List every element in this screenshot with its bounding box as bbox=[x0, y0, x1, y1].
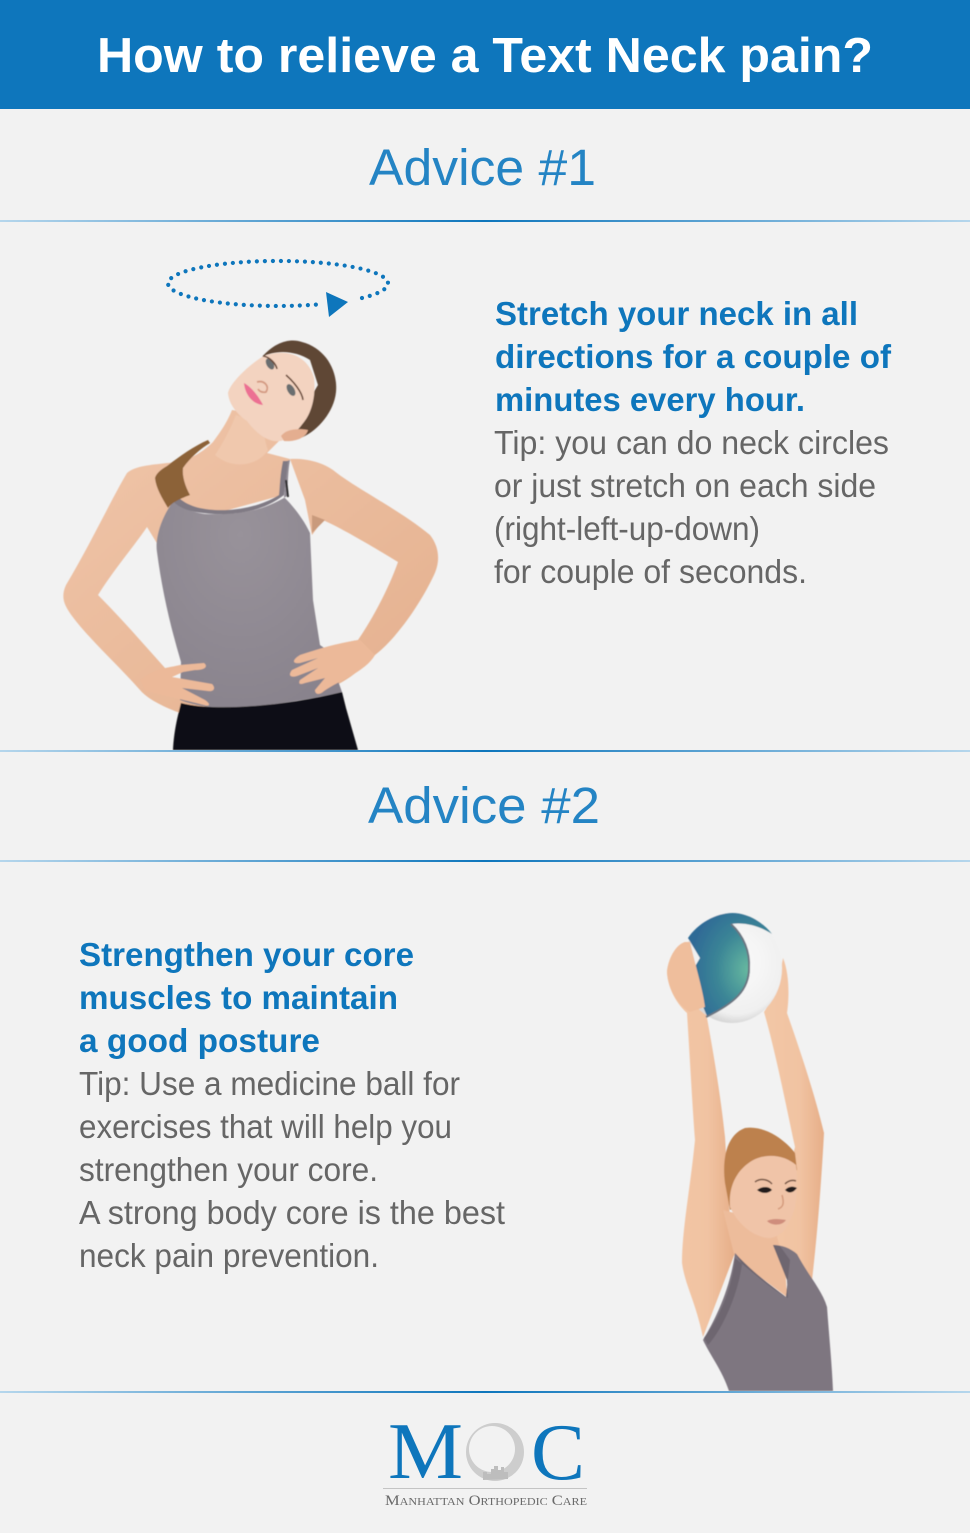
text block: advice 2: strengthen your core. bbox=[79, 1151, 378, 1188]
logo ring with skyline bbox=[466, 1423, 524, 1481]
logo: Manhattan Orthopedic Care bbox=[383, 1408, 587, 1509]
icon: dotted circular arrow bbox=[168, 261, 388, 317]
text block: advice 1: for couple of seconds. bbox=[494, 553, 807, 590]
neck and chest bbox=[723, 1210, 787, 1297]
eyes bbox=[264, 357, 276, 371]
text block: advice 2: exercises that will help you bbox=[79, 1108, 452, 1145]
brows bbox=[263, 356, 303, 400]
right arm bbox=[764, 958, 824, 1280]
hair bbox=[262, 341, 336, 440]
text block: advice 1: minutes every hour. bbox=[495, 381, 805, 418]
face bbox=[730, 1156, 797, 1238]
logo letter C: C bbox=[531, 1409, 585, 1497]
title: How to relieve a Text Neck pain? bbox=[97, 29, 873, 83]
header banner bbox=[0, 0, 970, 109]
text block: advice 1: (right-left-up-down) bbox=[494, 510, 760, 547]
body skin and arms bbox=[63, 410, 438, 718]
heading: Advice #2: Advice #2 bbox=[368, 777, 600, 834]
text block: advice 2: neck pain prevention. bbox=[79, 1237, 379, 1274]
text block: advice 1: directions for a couple of bbox=[495, 338, 892, 375]
black pants bbox=[173, 692, 358, 750]
left arm bbox=[667, 942, 735, 1337]
text block: advice 2: Tip: Use a medicine ball for bbox=[79, 1065, 460, 1102]
right hand bbox=[290, 640, 375, 694]
armpit shadow bbox=[312, 515, 325, 533]
text block: advice 2 bbox=[79, 936, 505, 1274]
text block: advice 2: A strong body core is the best bbox=[79, 1194, 505, 1231]
logo wordmark: Manhattan Orthopedic Care bbox=[385, 1493, 587, 1509]
brows bbox=[755, 1180, 796, 1184]
logo letter M: M bbox=[388, 1408, 463, 1496]
left hand on ball bbox=[667, 942, 705, 1012]
left hand bbox=[140, 663, 214, 706]
lips bbox=[767, 1219, 786, 1225]
nose bbox=[257, 382, 267, 392]
ear bbox=[281, 429, 308, 441]
text block: advice 2: Strengthen your core bbox=[79, 936, 414, 973]
medicine ball bbox=[682, 913, 782, 1023]
tank top bbox=[703, 1245, 833, 1391]
neck shading bbox=[215, 415, 268, 464]
text block: advice 1: or just stretch on each side bbox=[494, 467, 876, 504]
illustration: woman lifting medicine ball bbox=[667, 913, 833, 1391]
nose bbox=[778, 1195, 783, 1209]
ponytail bbox=[155, 440, 210, 508]
text block: advice 1: Stretch your neck in all bbox=[495, 295, 858, 332]
text block: advice 1 bbox=[494, 295, 892, 590]
text block: advice 2: a good posture bbox=[79, 1022, 320, 1059]
hair bbox=[724, 1128, 797, 1210]
heading: Advice #1: Advice #1 bbox=[369, 139, 596, 196]
lips bbox=[244, 383, 263, 405]
face bbox=[228, 353, 315, 441]
illustration: woman stretching neck bbox=[63, 341, 438, 750]
text block: advice 1: Tip: you can do neck circles bbox=[494, 424, 889, 461]
text block: advice 2: muscles to maintain bbox=[79, 979, 398, 1016]
eyes bbox=[757, 1187, 797, 1193]
tank top bbox=[157, 460, 342, 708]
